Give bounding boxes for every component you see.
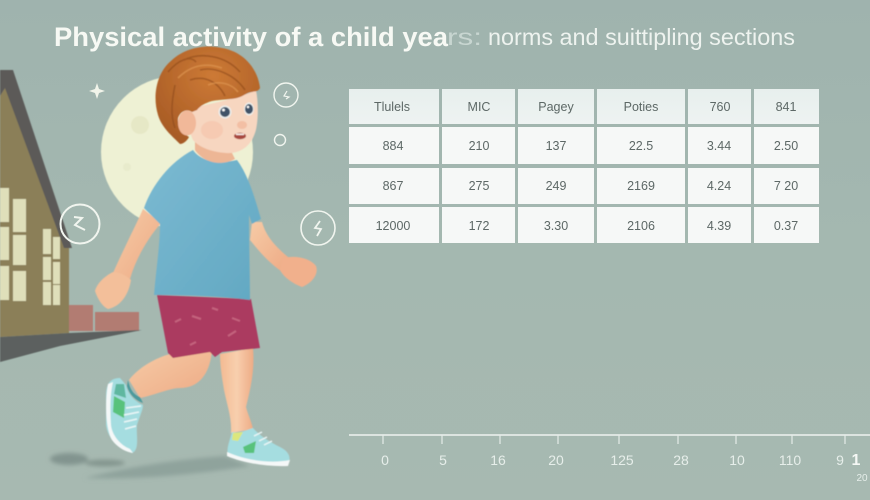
table row 1: 210 xyxy=(469,139,489,153)
table header row xyxy=(349,89,819,124)
right arm xyxy=(250,222,317,287)
house wall xyxy=(0,86,69,337)
data table xyxy=(349,89,819,243)
table row 1: 137 xyxy=(546,139,566,153)
axis with ticks and labels: 1 xyxy=(852,452,861,469)
table row 2: 7 20 xyxy=(774,179,798,193)
table header row: Tlulels xyxy=(374,100,410,114)
axis with ticks and labels: 20 xyxy=(548,452,564,468)
axis with ticks and labels: 9 xyxy=(836,452,844,468)
table header row: Poties xyxy=(624,100,658,114)
table row 3 xyxy=(349,207,819,243)
table row 1: 22.5 xyxy=(629,139,653,153)
axis with ticks and labels: 125 xyxy=(610,452,634,468)
title: Physical activity of a child yea xyxy=(54,22,449,52)
illustration: child xyxy=(95,46,317,466)
cheek blush xyxy=(201,121,223,139)
table header row: 760 xyxy=(710,100,730,114)
table row 1 xyxy=(349,127,819,164)
hair xyxy=(156,46,260,144)
laces xyxy=(124,406,141,429)
shirt xyxy=(144,150,261,300)
left shoe xyxy=(106,378,143,453)
axis with ticks and labels xyxy=(349,435,870,484)
table row 1: 884 xyxy=(383,139,403,153)
roof xyxy=(0,70,72,248)
eyes xyxy=(218,102,254,118)
icon: small circled glyph xyxy=(274,83,298,107)
axis with ticks and labels: 110 xyxy=(779,452,801,468)
table header row: 841 xyxy=(776,100,796,114)
icon: sparkle star xyxy=(89,83,105,99)
ground shadows xyxy=(50,453,250,478)
icon: circled right glyph xyxy=(301,211,335,245)
nose xyxy=(237,121,247,129)
icon: circled left glyph xyxy=(60,204,100,244)
table row 3: 0.37 xyxy=(774,219,798,233)
illustration: house xyxy=(0,70,142,362)
right shoe xyxy=(227,428,290,466)
face xyxy=(189,90,258,153)
table row 2 xyxy=(349,168,819,204)
title: rs: xyxy=(447,24,482,50)
table row 3: 2106 xyxy=(627,219,655,233)
table row 1: 2.50 xyxy=(774,139,798,153)
table row 2: 4.24 xyxy=(707,179,731,193)
table row 2: 2169 xyxy=(627,179,655,193)
brick wall xyxy=(68,305,139,331)
ear xyxy=(178,110,196,136)
table row 2: 275 xyxy=(469,179,489,193)
table row 3: 4.39 xyxy=(707,219,731,233)
shorts xyxy=(157,295,260,358)
left arm xyxy=(95,209,161,309)
title xyxy=(54,22,795,52)
table row 3: 3.30 xyxy=(544,219,568,233)
icon: moon xyxy=(101,76,253,228)
mouth xyxy=(234,133,246,139)
ground shadow xyxy=(0,330,142,362)
axis with ticks and labels: 5 xyxy=(439,452,447,468)
table row 3: 12000 xyxy=(376,219,410,233)
icon: small ring xyxy=(274,134,286,146)
table row 1: 3.44 xyxy=(707,139,731,153)
laces xyxy=(254,432,272,445)
neck xyxy=(195,140,235,163)
windows xyxy=(0,188,60,305)
table row 2: 249 xyxy=(546,179,566,193)
table row 3: 172 xyxy=(469,219,489,233)
axis with ticks and labels: 0 xyxy=(381,452,389,468)
title: norms and suittipling sections xyxy=(488,24,795,50)
back leg xyxy=(129,350,212,398)
table header row: MIC xyxy=(468,100,490,114)
axis with ticks and labels: 16 xyxy=(490,452,506,468)
axis with ticks and labels: 20 xyxy=(856,473,868,484)
front leg xyxy=(220,348,253,433)
table header row: Pagey xyxy=(538,100,574,114)
axis with ticks and labels: 28 xyxy=(673,452,689,468)
table row 2: 867 xyxy=(383,179,403,193)
axis with ticks and labels: 10 xyxy=(729,452,745,468)
